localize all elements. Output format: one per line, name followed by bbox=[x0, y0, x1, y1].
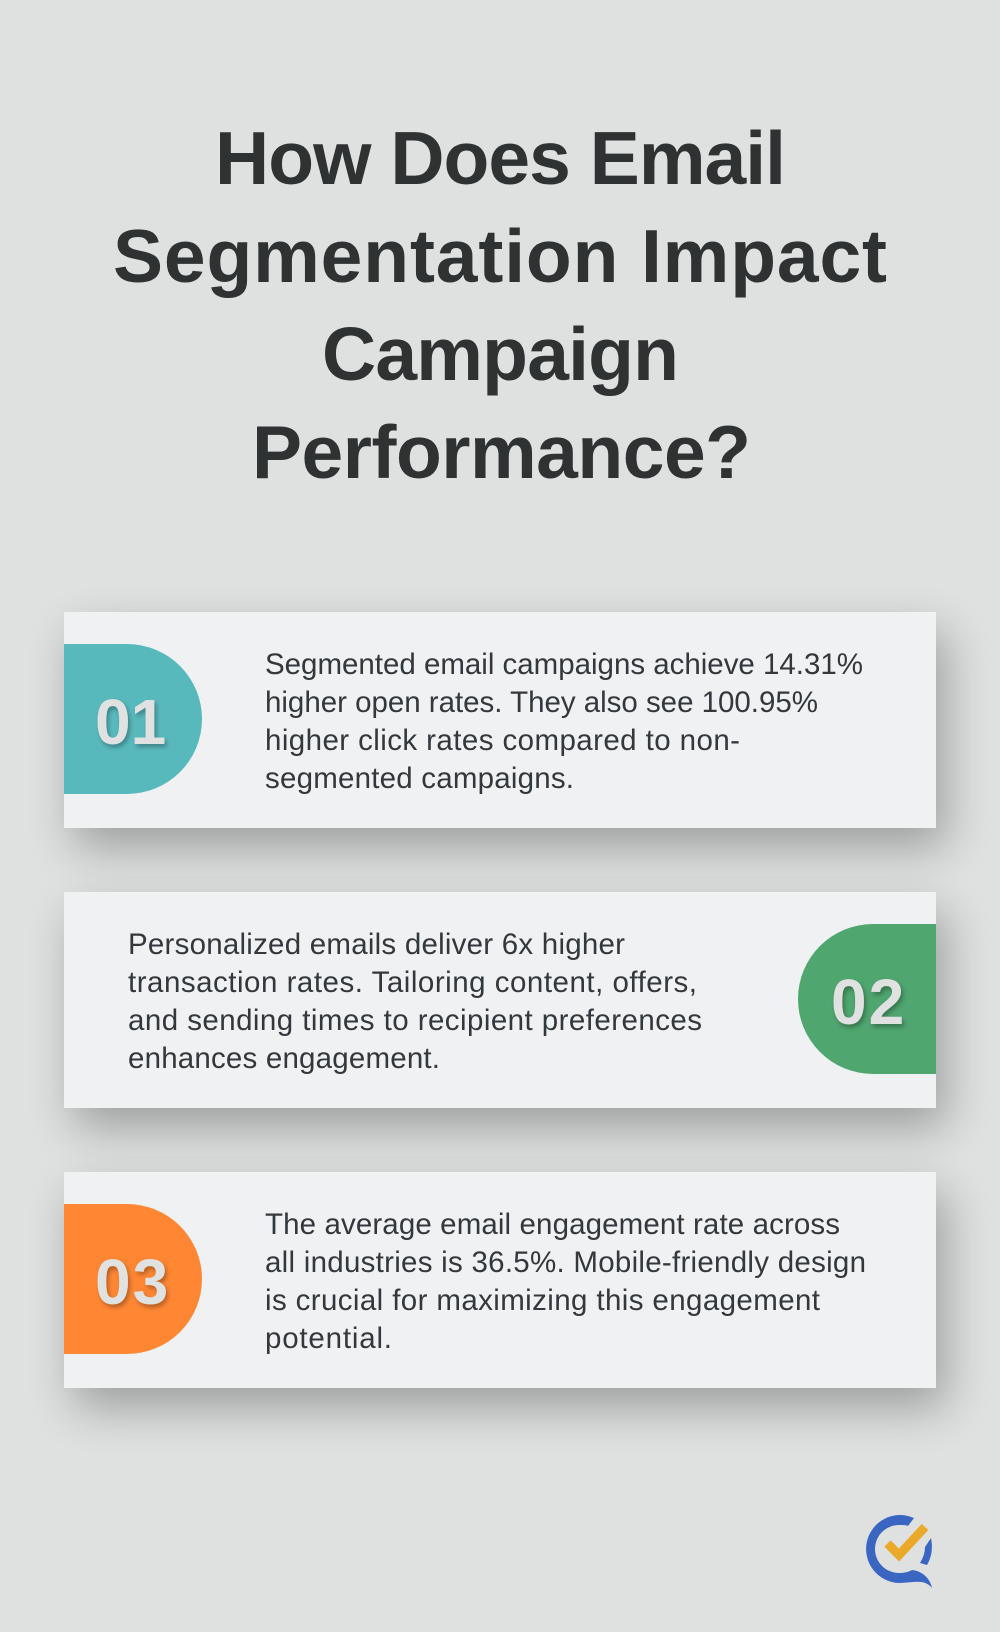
badge: 03 bbox=[64, 1204, 202, 1354]
text: card 2 body: enhances engagement. bbox=[128, 1042, 440, 1075]
panel: card 3 bbox=[64, 1172, 946, 1408]
text: card 3 body: all industries is 36.5%. Mobile-friendly design bbox=[265, 1246, 866, 1279]
title: Segmentation Impact bbox=[113, 214, 887, 298]
text: card 1 body bbox=[265, 648, 863, 795]
text: card 3 body: The average email engagement rate across bbox=[265, 1208, 840, 1241]
panel: card 2 bbox=[64, 892, 946, 1128]
text: card 3 body: potential. bbox=[265, 1322, 392, 1355]
badge: 01 bbox=[64, 644, 202, 794]
panel: card 1 bbox=[64, 612, 946, 848]
badge: 02 bbox=[798, 924, 936, 1074]
badge: 01: 01 bbox=[95, 686, 166, 758]
title: How Does Email bbox=[215, 116, 786, 200]
title: Campaign bbox=[322, 312, 679, 396]
title bbox=[113, 116, 887, 494]
text: card 2 body: Personalized emails deliver 6x higher bbox=[128, 928, 625, 961]
text: card 2 body: transaction rates. Tailoring content, offers, bbox=[128, 966, 697, 999]
text: card 1 body: Segmented email campaigns achieve 14.31% bbox=[265, 648, 863, 681]
badge: 02: 02 bbox=[831, 966, 906, 1038]
icon: logo speech bubble with check bbox=[866, 1515, 932, 1588]
text: card 3 body bbox=[265, 1208, 866, 1355]
text: card 1 body: higher open rates. They also see 100.95% bbox=[265, 686, 818, 719]
text: card 1 body: higher click rates compared to non- bbox=[265, 724, 740, 757]
text: card 1 body: segmented campaigns. bbox=[265, 762, 574, 795]
text: card 2 body: and sending times to recipient preferences bbox=[128, 1004, 702, 1037]
badge: 03: 03 bbox=[95, 1246, 170, 1318]
title: Performance? bbox=[252, 410, 751, 494]
text: card 2 body bbox=[128, 928, 702, 1075]
text: card 3 body: is crucial for maximizing this engagement bbox=[265, 1284, 820, 1317]
